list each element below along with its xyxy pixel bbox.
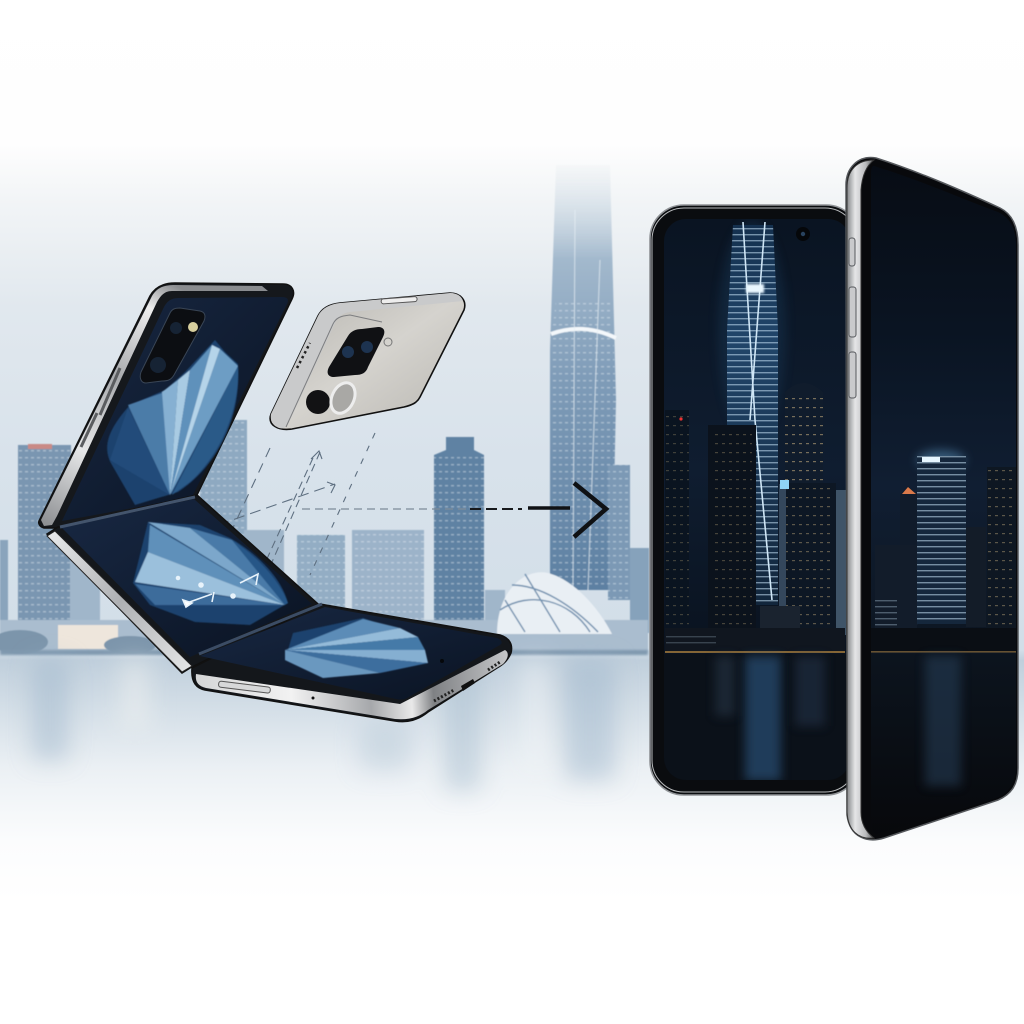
- right phone: side rail and door: [846, 158, 1021, 840]
- night supertall tower: [718, 220, 786, 605]
- dashed motion lines behind the arrow: [205, 433, 375, 588]
- door screen: [871, 166, 1016, 792]
- upper panel: [39, 283, 294, 528]
- lower wallpaper fan: [285, 618, 428, 678]
- side keys: [849, 238, 856, 398]
- door water: [922, 653, 964, 788]
- right phone: slab front: [650, 205, 860, 795]
- waterfront dome building: [497, 572, 612, 634]
- charging port and speakers: [312, 662, 500, 701]
- top key: [381, 296, 417, 304]
- water reflections: [32, 660, 615, 790]
- central supertall tower: [550, 165, 616, 590]
- night buildings: [665, 383, 846, 653]
- middle panel: [47, 495, 318, 673]
- selfie camera: [796, 227, 810, 241]
- middle wallpaper fan: [133, 522, 288, 625]
- speaker holes: [297, 343, 310, 368]
- midground buildings: [0, 420, 649, 633]
- volume buttons: [81, 368, 120, 447]
- lower lens: [306, 390, 330, 414]
- grey lens: [326, 379, 360, 417]
- floating camera back panel: [270, 293, 465, 429]
- upper wallpaper fan: [107, 340, 238, 505]
- door skyline: [871, 450, 1021, 653]
- front screen water: [714, 651, 826, 780]
- front screen: [664, 219, 850, 781]
- skyline backdrop: [0, 165, 649, 790]
- constellation sparkle: [176, 574, 258, 607]
- transition arrow: [302, 483, 606, 537]
- metal rail: [847, 160, 874, 838]
- dark camera bar: [328, 327, 384, 377]
- camera module: [140, 308, 205, 383]
- foldable phone: [39, 283, 512, 722]
- lower panel: [192, 604, 512, 722]
- side key: [218, 681, 271, 693]
- low shoreline: [0, 620, 648, 655]
